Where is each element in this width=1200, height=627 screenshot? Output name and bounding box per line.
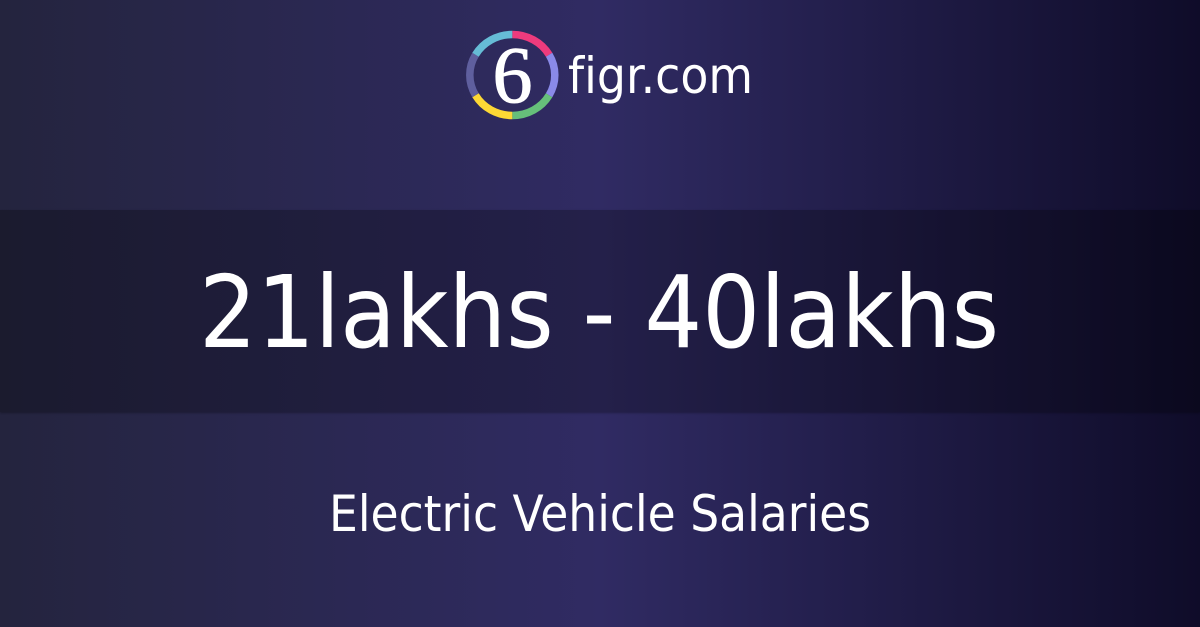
logo: 6figr.com	[470, 32, 753, 120]
subtitle: Electric Vehicle Salaries	[329, 485, 871, 543]
logo numeral 6: 6	[492, 32, 532, 120]
icon: segmented ring	[470, 34, 555, 116]
logo wordmark: figr.com	[568, 47, 753, 105]
headline salary range: 21lakhs - 40lakhs	[199, 254, 999, 371]
dark banner band	[0, 210, 1200, 412]
